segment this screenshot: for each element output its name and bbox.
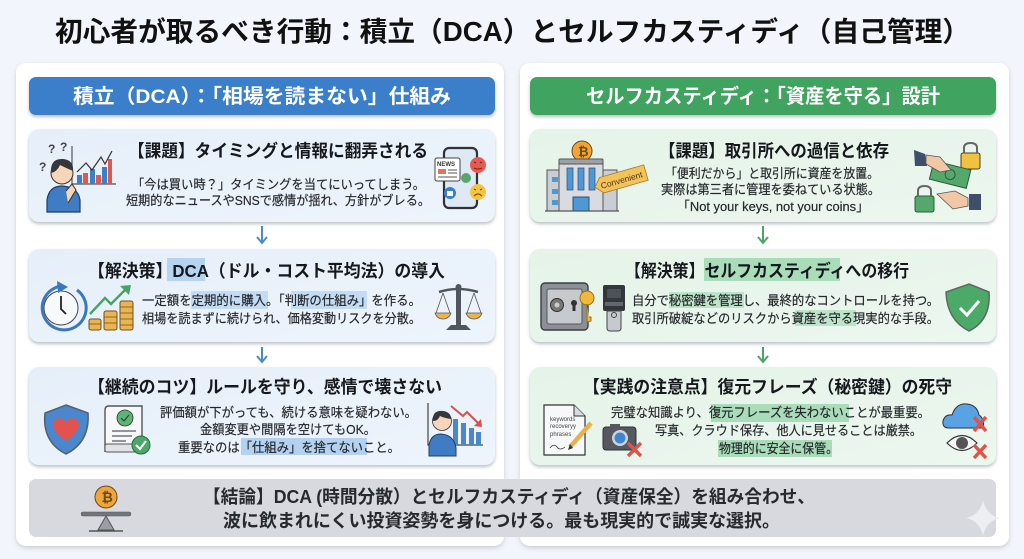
card: DCA tips: 評価額が下がっても、続ける意味を疑わない。: [160, 405, 417, 420]
icon: sparkle: [966, 500, 1000, 536]
icon: hardware wallet: [603, 285, 625, 331]
heading: DCA: 積立（DCA）：「相場を読まない」仕組み: [73, 86, 451, 108]
icon: camera crossed out: [603, 424, 641, 456]
card: DCA solution: 一定額を定期的に購入。「判断の仕組み」を作る。: [142, 293, 421, 308]
heading: self custody: [530, 77, 996, 115]
card: DCA tips: [29, 367, 495, 465]
icon: hands, money and locks: [914, 143, 981, 212]
card: DCA solution: [29, 249, 495, 342]
card: custody problem: 「便利だから」と取引所に資産を放置。: [665, 166, 879, 181]
card: DCA problem: [29, 129, 495, 222]
card: custody caution: 【実践の注意点】復元フレーズ（秘密鍵）の死守: [583, 377, 952, 397]
card: custody problem: [530, 129, 996, 222]
icon: bitcoin on balance: ₿: [102, 489, 113, 505]
icon: exchange building: Convenient: [600, 169, 644, 191]
card: DCA problem: 【課題】タイミングと情報に翻弄される: [128, 141, 428, 161]
icon: shield with heart: [45, 405, 88, 454]
card: custody problem: 実際は第三者に管理を委ねている状態。: [661, 182, 880, 197]
icon: recovery phrase document: recoveryy: [550, 424, 576, 430]
icon: eye crossed out: [947, 436, 986, 458]
card: DCA problem: 短期的なニュースやSNSで感情が揺れ、方針がブレる。: [126, 193, 430, 208]
icon: exchange building: [545, 141, 648, 211]
icon: exchange building: ₿: [578, 144, 589, 159]
conclusion banner: 波に飲まれにくい投資姿勢を身につける。最も現実的で誠実な選択。: [223, 511, 780, 531]
icon: confused person with chart: ?: [60, 140, 67, 154]
card: DCA solution: 【解決策】DCA（ドル・コスト平均法）の導入: [88, 261, 445, 281]
icon: person with falling chart: [428, 403, 483, 456]
card: custody solution: 取引所破綻などのリスクから資産を守る現実的な手段。: [632, 311, 939, 326]
card: DCA solution: 相場を読まずに続けられ、価格変動リスクを分散。: [142, 311, 421, 326]
card: custody problem: 「Not your keys, not your coins」: [677, 199, 869, 214]
icon: clock: [42, 281, 86, 330]
icon: recovery phrase document: phrases: [550, 432, 571, 438]
icon: confused person with chart: ?: [48, 142, 55, 156]
icon: recovery phrase document: keywords: [550, 417, 575, 423]
icon: phone with news: NEWS: [437, 162, 455, 168]
card: custody solution: 自分で秘密鍵を管理し、最終的なコントロールを持つ。: [632, 293, 939, 308]
icon: scales: [435, 284, 482, 330]
heading: self custody: セルフカスティディ：「資産を守る」設計: [586, 85, 940, 108]
icon: confused person with chart: [39, 140, 116, 212]
card: custody solution: 【解決策】セルフカスティディへの移行: [625, 261, 909, 281]
card: DCA tips: 【継続のコツ】ルールを守り、感情で壊さない: [88, 377, 442, 397]
card: DCA problem: 「今は買い時？」タイミングを当てにいってしまう。: [132, 177, 425, 192]
card: custody caution: 完璧な知識より、復元フレーズを失わないことが最重要。: [611, 405, 930, 420]
icon: recovery phrase document: [544, 405, 591, 455]
arrow: [758, 347, 768, 362]
heading: DCA: [29, 77, 495, 115]
icon: green shield: [946, 284, 989, 331]
panel: DCA: [16, 63, 504, 546]
arrow: [257, 226, 267, 243]
icon: confused person with chart: ?: [39, 160, 46, 174]
conclusion banner: 【結論】DCA (時間分散）とセルフカスティディ（資産保全）を組み合わせ、: [203, 486, 815, 507]
card: custody caution: 写真、クラウド保存、他人に見せることは厳禁。: [655, 423, 922, 438]
arrow: [257, 347, 267, 362]
icon: phone with news: [435, 148, 486, 208]
card: custody solution: [530, 249, 996, 342]
icon: rule book: [105, 406, 150, 454]
panel: self custody: [520, 63, 1009, 546]
conclusion banner: [29, 479, 1000, 537]
card: custody caution: [530, 367, 996, 465]
card: DCA tips: 金額変更や間隔を空けてもOK。: [200, 422, 376, 437]
title: 初心者が取るべき行動：積立（DCA）とセルフカスティディ（自己管理）: [55, 16, 970, 47]
card: custody problem: 【課題】取引所への過信と依存: [659, 141, 889, 161]
icon: cloud crossed out: [943, 404, 986, 431]
icon: bitcoin on balance: [81, 486, 131, 531]
icon: coins and growth arrow: [89, 285, 133, 330]
card: DCA tips: 重要なのは「仕組み」を捨てないこと。: [178, 440, 400, 455]
arrow: [758, 226, 768, 243]
card: custody caution: 物理的に安全に保管。: [719, 441, 838, 456]
icon: safe and key: [541, 283, 594, 330]
